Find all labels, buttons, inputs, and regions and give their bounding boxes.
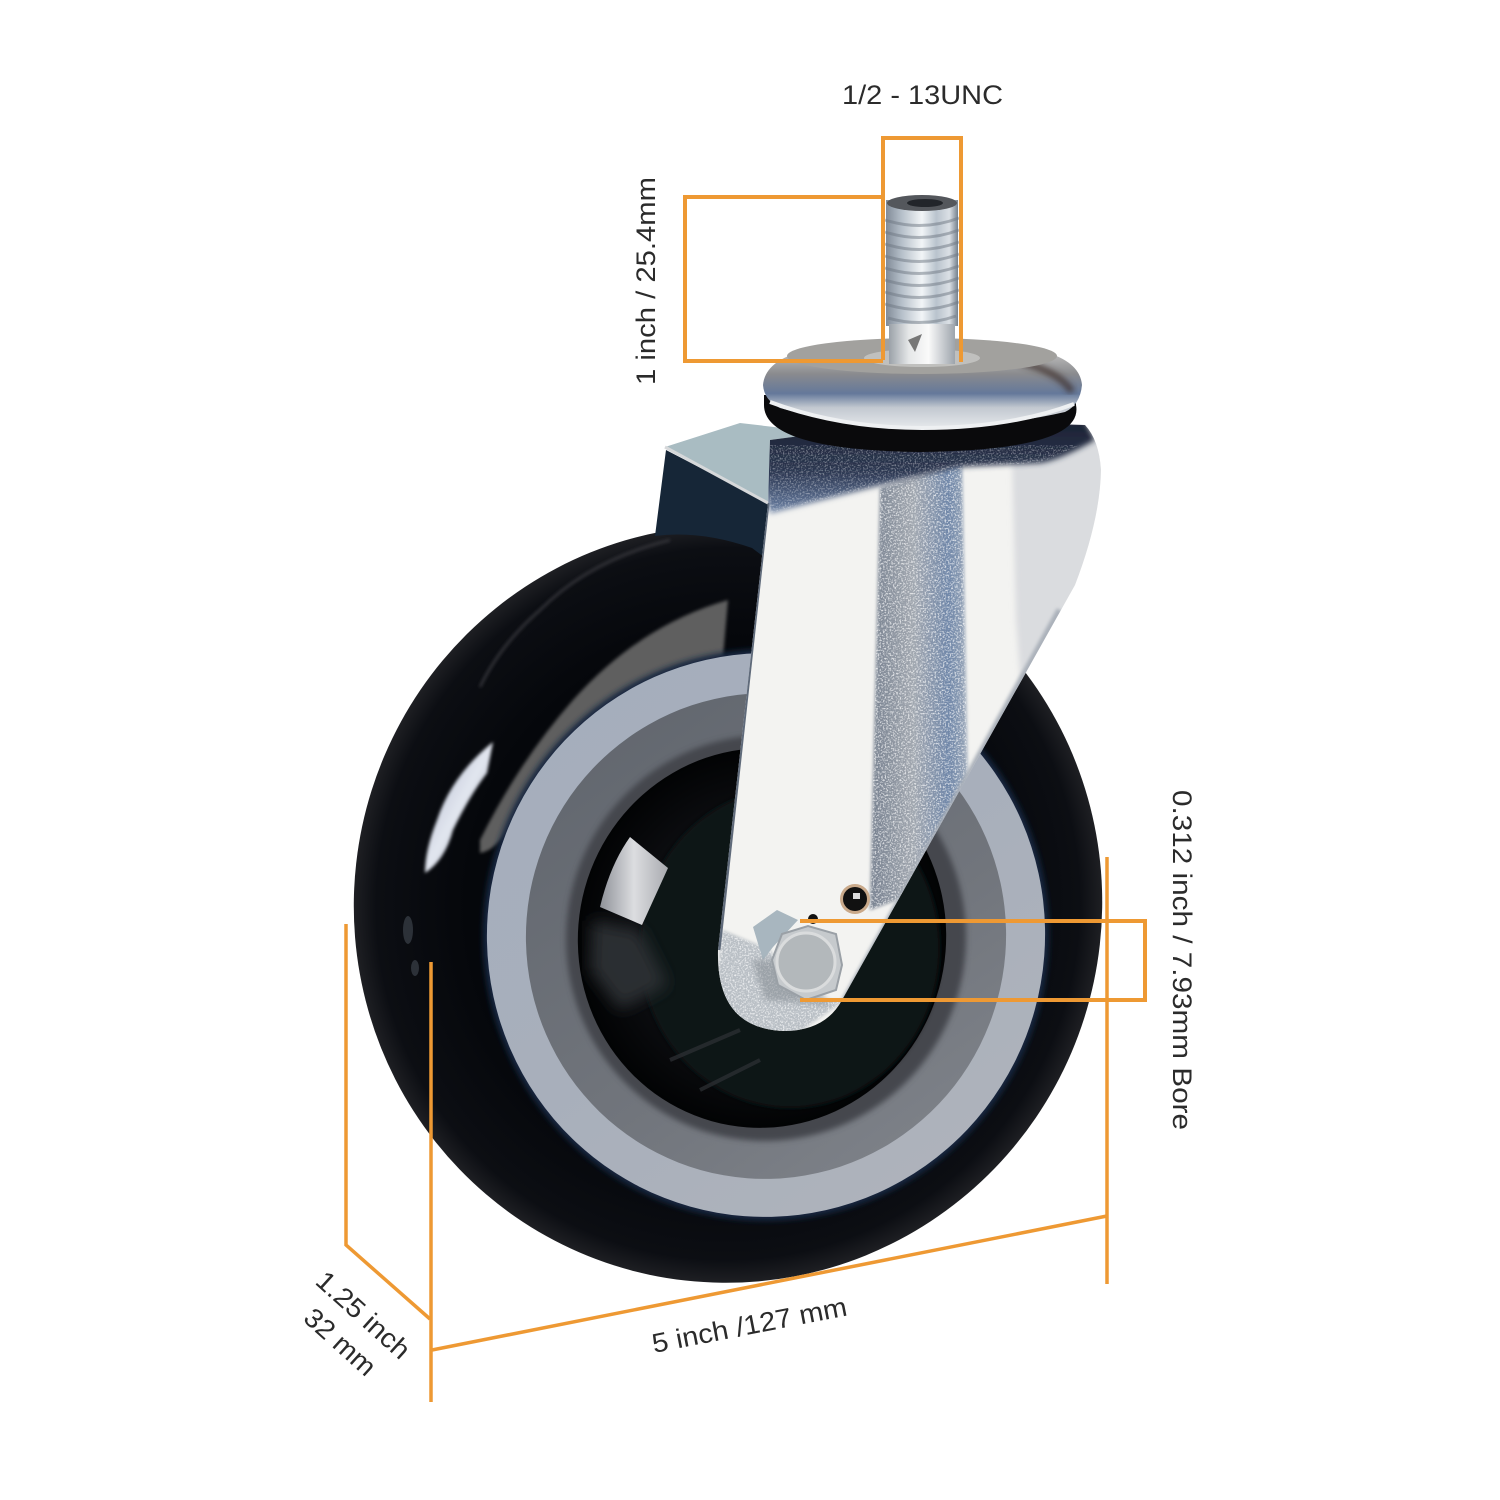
label: thread size: 1/2 - 13UNC	[842, 80, 1003, 110]
rim shadow edge	[438, 604, 1094, 1266]
swivel head	[763, 338, 1082, 452]
bracket plate	[712, 420, 1105, 1038]
diagonal edge band	[845, 610, 1060, 1000]
tire reflection band	[480, 600, 728, 853]
rivet hole	[808, 884, 870, 924]
axle bolt	[752, 910, 842, 1005]
infographic canvas	[304, 84, 1192, 1402]
black hub	[548, 719, 976, 1157]
bracket back flange	[655, 450, 768, 560]
label: wheel width millimetres: 32 mm	[298, 1302, 382, 1382]
wheel	[283, 456, 1173, 1352]
dimension: wheel diameter line	[431, 857, 1107, 1402]
lower speckled zone	[718, 929, 841, 1031]
central speckled stripe	[870, 462, 968, 910]
dimension: wheel width line	[346, 924, 430, 1319]
tire	[283, 456, 1173, 1352]
dimension: stud thread diameter bracket	[883, 138, 961, 362]
caster photo	[283, 195, 1173, 1352]
dark shoulder band	[740, 420, 1095, 513]
tire highlight	[425, 742, 493, 873]
label: stud length: 1 inch / 25.4mm	[631, 177, 661, 385]
outer grey rim	[442, 609, 1090, 1261]
label: wheel diameter: 5 inch /127 mm	[649, 1292, 850, 1359]
dimension: bore bracket	[800, 921, 1145, 1000]
right pale panel	[1011, 436, 1101, 683]
dimension: stud length bracket	[685, 197, 883, 361]
label: wheel width inches: 1.25 inch	[310, 1265, 416, 1365]
label: bore: 0.312 inch / 7.93mm Bore	[1167, 790, 1197, 1130]
inner grey rim	[487, 655, 1045, 1217]
threaded stud	[885, 195, 959, 364]
